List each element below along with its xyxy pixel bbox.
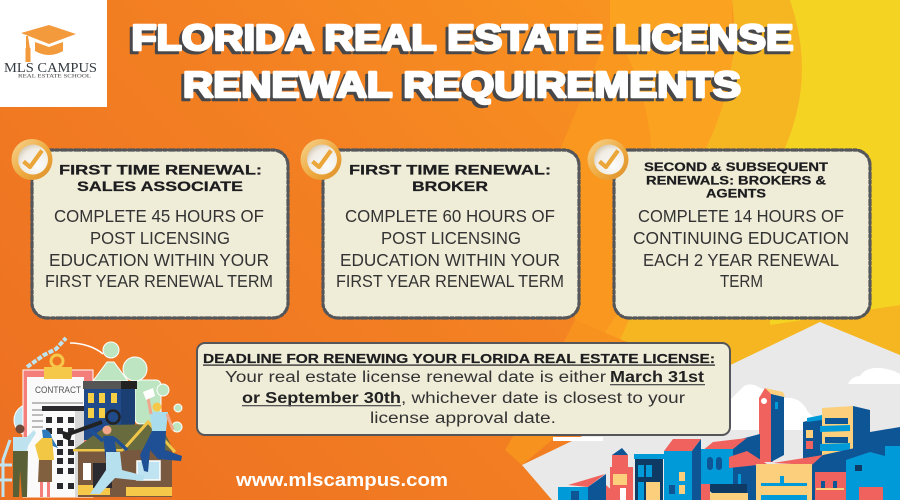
panel body text: COMPLETE 60 HOURS OF bbox=[345, 206, 555, 226]
blue building bbox=[83, 381, 137, 440]
title bbox=[128, 17, 794, 108]
panel body text: EACH 2 YEAR RENEWAL bbox=[643, 250, 839, 270]
panel heading: FIRST TIME RENEWAL: bbox=[59, 162, 262, 178]
clipboard clip bbox=[44, 355, 72, 379]
panel body text: EDUCATION WITHIN YOUR bbox=[340, 250, 560, 270]
panel body text: EDUCATION WITHIN YOUR bbox=[49, 250, 269, 270]
callout body bbox=[225, 369, 705, 427]
panel: broker bbox=[300, 139, 579, 318]
logo tagline: REAL ESTATE SCHOOL bbox=[18, 74, 92, 80]
leaf sprig bbox=[0, 338, 103, 497]
pale blue circle bbox=[14, 404, 46, 436]
panel body text: COMPLETE 45 HOURS OF bbox=[54, 206, 264, 226]
icon: check badge bbox=[300, 139, 342, 180]
title: RENEWAL REQUIREMENTS bbox=[180, 67, 738, 108]
callout body: , whichever date is closest to your bbox=[401, 390, 685, 407]
website url: www.mlscampus.com bbox=[235, 470, 448, 490]
key bbox=[63, 410, 120, 441]
title: FLORIDA REAL ESTATE LICENSE bbox=[132, 17, 794, 58]
callout body: or September 30th bbox=[242, 390, 401, 407]
logo wordmark: MLS CAMPUS bbox=[4, 61, 97, 76]
callout body: Your real estate license renewal date is either bbox=[225, 369, 606, 386]
panel body text bbox=[45, 206, 273, 291]
panel heading: FIRST TIME RENEWAL: bbox=[349, 162, 551, 178]
person: running man bbox=[90, 426, 145, 494]
callout heading: DEADLINE FOR RENEWING YOUR FLORIDA REAL ESTATE LICENSE: bbox=[203, 352, 715, 366]
green blobs bbox=[93, 342, 182, 432]
callout body: license approval date. bbox=[370, 410, 556, 427]
panel: sales associate bbox=[12, 139, 288, 318]
panel body text: FIRST YEAR RENEWAL TERM bbox=[45, 271, 273, 291]
house bbox=[73, 422, 175, 497]
contract and house illustration bbox=[0, 338, 182, 497]
icon: check badge bbox=[12, 139, 52, 180]
panel heading bbox=[644, 160, 829, 200]
deadline callout bbox=[197, 343, 730, 435]
panel body text: POST LICENSING bbox=[90, 228, 230, 248]
panel body text: POST LICENSING bbox=[381, 228, 521, 248]
text lines and office building bbox=[32, 402, 85, 497]
icon: check badge bbox=[588, 139, 628, 180]
hexagon backdrop bbox=[522, 322, 900, 500]
panel heading: SECOND & SUBSEQUENT bbox=[644, 160, 829, 174]
clouds bbox=[553, 368, 900, 441]
panel heading: RENEWALS: BROKERS & bbox=[646, 174, 826, 188]
panel: subsequent renewals bbox=[588, 139, 870, 318]
panel heading bbox=[59, 162, 262, 194]
logo bbox=[0, 0, 107, 107]
panel heading: SALES ASSOCIATE bbox=[77, 179, 243, 194]
person: jumping woman bbox=[140, 388, 182, 472]
clipboard bbox=[23, 370, 93, 497]
panel body text bbox=[633, 206, 849, 291]
contract label: CONTRACT bbox=[35, 385, 81, 396]
city illustration bbox=[522, 322, 900, 500]
panel heading: BROKER bbox=[412, 179, 488, 194]
panel heading bbox=[349, 162, 551, 194]
icon: graduation cap bbox=[21, 25, 76, 62]
panel heading: AGENTS bbox=[706, 186, 766, 200]
callout body: March 31st bbox=[610, 369, 704, 386]
panel body text bbox=[336, 206, 564, 291]
panel body text: COMPLETE 14 HOURS OF bbox=[638, 206, 844, 226]
title: RENEWAL REQUIREMENTS bbox=[183, 64, 741, 105]
panel body text: TERM bbox=[720, 271, 763, 291]
panel body text: FIRST YEAR RENEWAL TERM bbox=[336, 271, 564, 291]
person: couple bbox=[13, 424, 58, 497]
panel body text: CONTINUING EDUCATION bbox=[633, 228, 849, 248]
buildings bbox=[558, 388, 900, 500]
title: FLORIDA REAL ESTATE LICENSE bbox=[128, 20, 790, 61]
